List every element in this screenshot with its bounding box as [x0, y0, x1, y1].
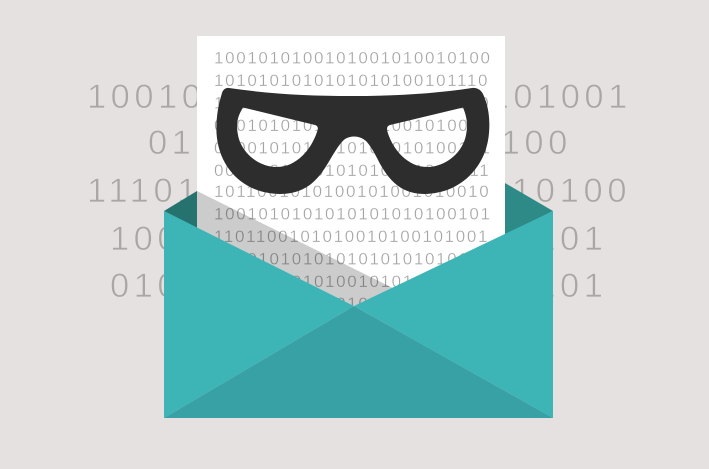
paper binary text: 0010101010101010101001011 — [214, 161, 490, 180]
envelope back right — [505, 183, 553, 235]
paper binary text: 1001010101010101010100101 — [214, 204, 492, 224]
paper binary text: 1001010100101001010010100 — [214, 48, 492, 68]
paper binary text: 0101010101010101001010010 — [214, 116, 492, 135]
paper sheet — [197, 36, 505, 316]
background binary text: 100101010101010010101 — [110, 220, 607, 258]
paper binary text — [214, 48, 492, 313]
paper binary text: 1010101010101010101010100 — [214, 250, 492, 268]
background binary text: 010101010101001100 — [148, 124, 572, 162]
paper binary text: 1010101010101010100101110 — [214, 71, 489, 90]
background binary text: 010101010100101010101 — [110, 267, 607, 305]
paper binary text: 1010101010100101010101010 — [214, 272, 492, 291]
envelope front — [164, 211, 553, 418]
flap shadow on paper — [197, 191, 397, 306]
background binary text: 11101010101001010010100 — [87, 172, 631, 210]
left flap — [164, 211, 354, 418]
icon: spy mask glasses — [216, 88, 489, 194]
bottom overlap — [164, 306, 553, 418]
paper binary text: 1010101001010101001010110 — [214, 94, 490, 112]
envelope back left — [164, 191, 197, 228]
paper binary text: 1101100101010010100101001 — [214, 227, 489, 246]
paper binary text: 0100101010010101010100101 — [214, 138, 492, 158]
paper binary text: 1010101010101010101010101 — [214, 294, 492, 313]
background binary text: 10010101001010010101001 — [87, 78, 632, 116]
paper binary text: 1011001010100101001010010 — [214, 182, 490, 201]
right flap — [354, 211, 553, 418]
background binary text — [87, 78, 632, 305]
